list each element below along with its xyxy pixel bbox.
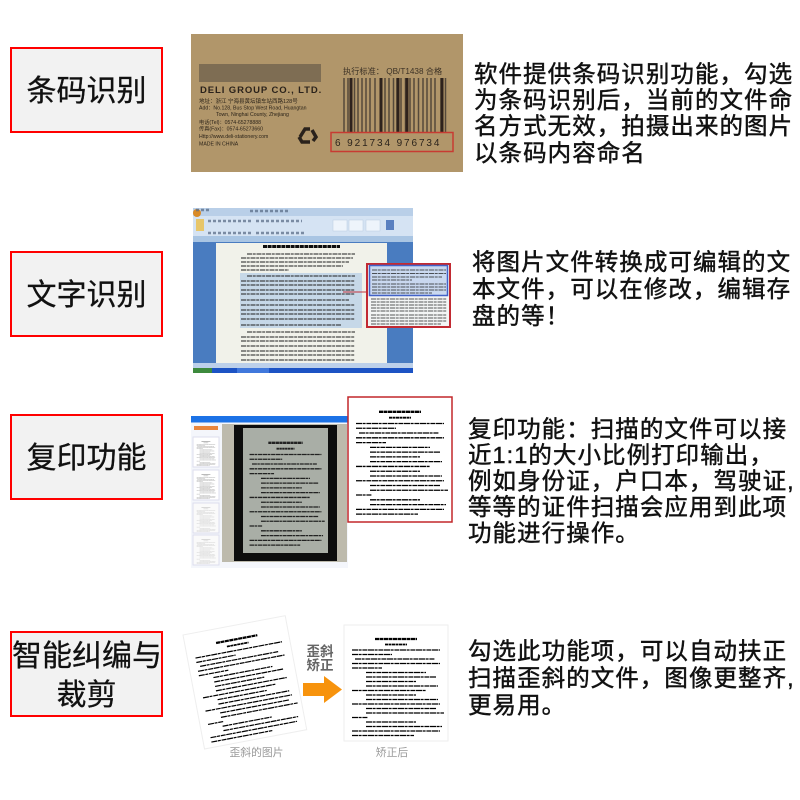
text: deskew description: 扫描歪斜的文件，图像更整齐, — [468, 665, 795, 691]
panel: copy software screenshot — [191, 397, 452, 568]
panel: deskew illustration — [183, 616, 448, 759]
company address text: MADE IN CHINA — [199, 142, 239, 148]
company address text: 电话(Tel)：0574-65278888 — [199, 118, 261, 126]
text: barcode description — [474, 61, 793, 166]
text: barcode description: 软件提供条码识别功能，勾选 — [474, 61, 793, 87]
logo — [194, 426, 218, 430]
deskew caption: 矫正 — [306, 658, 334, 673]
arrow — [303, 676, 342, 703]
deskew caption — [306, 643, 334, 673]
page text lines — [241, 254, 355, 360]
skewed page — [183, 616, 307, 749]
barcode digits: 6 921734 976734 — [335, 138, 441, 149]
label: text recognition: 文字识别 — [26, 279, 146, 312]
text: copy description — [468, 416, 795, 546]
text: copy description: 复印功能：扫描的文件可以接 — [468, 416, 787, 442]
text: text recognition description — [472, 249, 791, 329]
thumbnail pages — [193, 437, 219, 565]
text: copy description: 功能进行操作。 — [468, 520, 640, 546]
panel: word screenshot — [193, 208, 450, 373]
magnified inset — [367, 264, 450, 327]
highlight box — [331, 132, 453, 152]
company address text — [199, 85, 322, 148]
company address text: 地址：浙江 宁海县黄坛镇车站西路128号 — [199, 97, 298, 105]
company address text: 传真(Fax)：0574-65273660 — [199, 124, 263, 132]
text: copy description: 例如身份证，户口本，驾驶证, — [468, 468, 795, 494]
panel: barcode photo — [191, 34, 463, 172]
status bar and taskbar — [193, 363, 413, 368]
icon: recycling — [299, 129, 316, 142]
label: deskew and crop: 智能纠编与 — [12, 640, 162, 673]
text: text recognition description: 本文件，可以在修改，编辑存 — [472, 276, 791, 302]
text: deskew description: 更易用。 — [468, 692, 566, 718]
deskew caption: 歪斜 — [306, 643, 334, 659]
barcode standard text: 执行标准： QB/T1438 合格 — [343, 66, 442, 76]
text: text recognition description: 盘的等！ — [472, 303, 570, 329]
text: deskew description — [468, 638, 795, 718]
company address text: DELI GROUP CO., LTD. — [200, 85, 322, 96]
company address text: Town, Ninghai County, Zhejiang — [216, 112, 289, 118]
enlarged page inset — [348, 397, 452, 522]
document page — [216, 243, 387, 363]
label: barcode recognition: 条码识别 — [26, 75, 146, 108]
corrected page — [344, 625, 448, 741]
barcode bars — [344, 78, 446, 133]
text: barcode description: 为条码识别后，当前的文件命 — [474, 87, 793, 113]
scanner bed — [234, 425, 337, 561]
text: copy description: 等等的证件扫描会应用到此项 — [468, 494, 787, 520]
text: deskew description: 勾选此功能项，可以自动扶正 — [468, 638, 787, 664]
text: barcode description: 以条码内容命名 — [474, 140, 646, 166]
caption: skewed: 歪斜的图片 — [230, 745, 283, 759]
selected text highlight — [240, 273, 362, 328]
text: barcode description: 名方式无效，拍摄出来的图片 — [474, 113, 793, 139]
company address text: Add：No.128, Bus Stop West Road, Huangtan — [199, 106, 307, 112]
caption: corrected: 矫正后 — [376, 746, 408, 759]
page title — [263, 245, 340, 248]
label: deskew and crop — [10, 631, 163, 717]
label: text recognition — [10, 251, 163, 337]
ribbon — [193, 208, 413, 216]
text: text recognition description: 将图片文件转换成可编辑的文 — [472, 249, 791, 275]
label: deskew and crop: 裁剪 — [56, 679, 116, 712]
connector line — [343, 291, 368, 293]
text: copy description: 近1:1的大小比例打印输出， — [468, 442, 774, 468]
redacted company name bar — [199, 64, 321, 82]
company address text: Http://www.deli-stationery.com — [199, 134, 268, 140]
label: copy function: 复印功能 — [26, 442, 146, 475]
label: copy function — [10, 414, 163, 500]
label: barcode recognition — [10, 47, 163, 133]
